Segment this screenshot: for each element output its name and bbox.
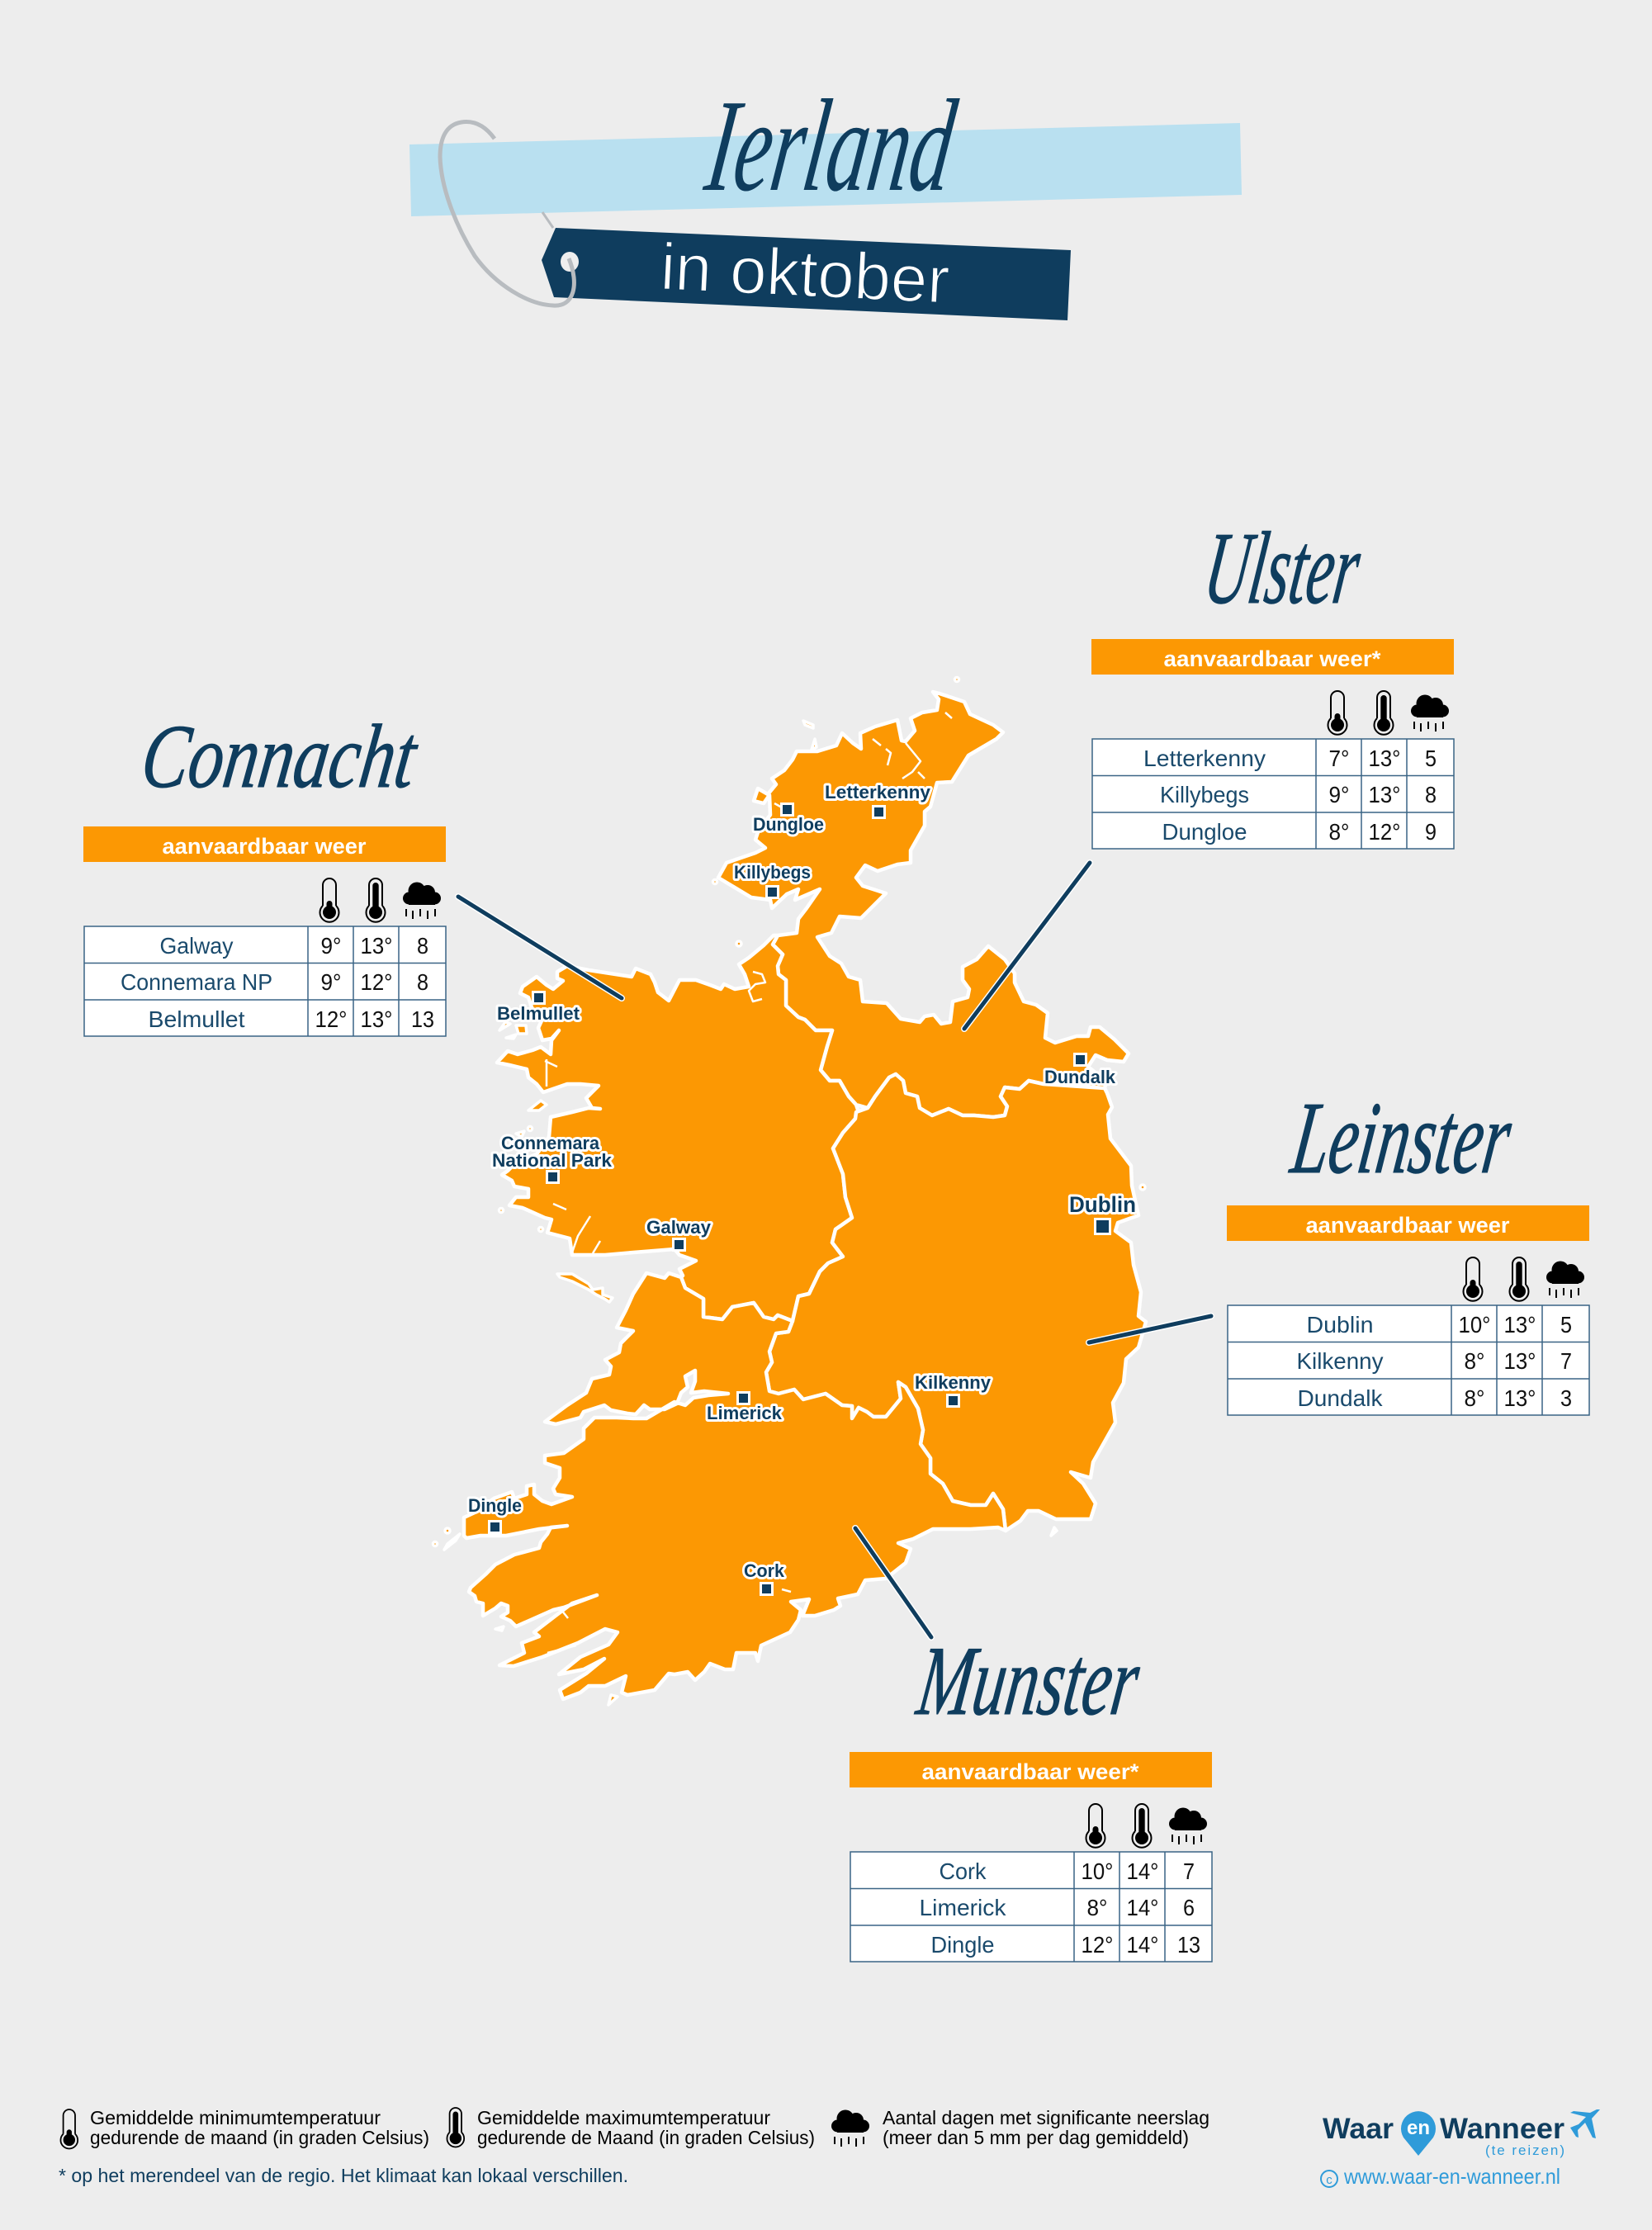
inlet details [545, 713, 952, 1653]
subtitle tag [542, 228, 1071, 320]
heading: Connacht [136, 705, 424, 807]
table: Letterkenny [1143, 746, 1266, 771]
table: 13° [1369, 746, 1400, 771]
city: Dingle [468, 1495, 522, 1534]
legend icon: minimum temperature [60, 2109, 78, 2148]
city: Dundalk [1044, 1053, 1115, 1087]
city: Galway: Galway [646, 1217, 711, 1238]
city: Killybegs [734, 862, 811, 899]
table: Kilkenny [1296, 1348, 1384, 1374]
map of Ireland [433, 677, 1146, 1705]
table: 12° [1082, 1932, 1113, 1958]
icons [320, 878, 441, 922]
table: Dingle [931, 1932, 994, 1958]
legend text: rain days: (meer dan 5 mm per dag gemiddeld) [883, 2127, 1189, 2148]
table: 9° [320, 933, 342, 959]
city: Letterkenny: Letterkenny [825, 782, 930, 803]
footnote: * op het merendeel van de regio. Het klimaat kan lokaal verschillen. [59, 2165, 628, 2186]
title text: Ierland [698, 73, 963, 219]
table: 13° [1504, 1348, 1536, 1374]
city: Connemara National Park [492, 1133, 612, 1184]
table: 8° [1329, 819, 1349, 845]
icon: plane [1570, 2109, 1600, 2138]
panel: Ulster [1091, 512, 1454, 849]
banner [1091, 639, 1454, 675]
leader line: Munster [855, 1528, 931, 1637]
legend icon: maximum temperature [447, 2108, 464, 2147]
legend text: maximum temperature [477, 2107, 815, 2148]
table: Belmullet [149, 1006, 245, 1032]
table: 5 [1425, 746, 1437, 771]
table: 8° [1086, 1895, 1108, 1920]
table: Dungloe [1162, 819, 1247, 845]
city: Kilkenny: Kilkenny [915, 1372, 991, 1393]
city: Limerick [707, 1391, 782, 1423]
table: Limerick [920, 1895, 1007, 1920]
region: Ulster [718, 692, 1129, 1117]
banner: aanvaardbaar weer [1306, 1213, 1510, 1238]
panel: Leinster [1227, 1082, 1589, 1415]
legend text: maximum temperature: gedurende de Maand (in graden Celsius) [477, 2127, 815, 2148]
table: 12° [315, 1006, 347, 1032]
city: Belmullet: Belmullet [497, 1003, 580, 1024]
islands [433, 677, 1145, 1705]
banner: aanvaardbaar weer [162, 834, 367, 859]
leader line: Ulster [964, 863, 1090, 1029]
table: 8 [417, 933, 428, 959]
heading: Leinster [1285, 1082, 1518, 1195]
website: www.waar-en-wanneer.nl [1343, 2164, 1560, 2189]
legend [59, 2107, 1209, 2186]
subtitle text: in oktober [659, 230, 951, 317]
city markers and labels [468, 782, 1136, 1596]
region: Munster [464, 1273, 1006, 1699]
logo subtitle: (te reizen) [1485, 2142, 1564, 2158]
city: Dungloe [753, 803, 824, 835]
city: Dingle: Dingle [468, 1495, 522, 1516]
legend text: minimum temperature: gedurende de maand (in graden Celsius) [90, 2127, 429, 2148]
city: Cork [744, 1560, 784, 1596]
icons [1086, 1804, 1207, 1848]
city: Killybegs: Killybegs [734, 862, 811, 883]
table: 7° [1329, 746, 1349, 771]
logo pin [1401, 2111, 1436, 2156]
table: Galway [160, 933, 233, 959]
logo wordmark: Wanneer: Wanneer [1440, 2113, 1564, 2145]
tag ring [440, 122, 574, 305]
table: 13° [1504, 1385, 1536, 1411]
legend text: rain days: Aantal dagen met significante neerslag [883, 2107, 1209, 2128]
table: 13° [1369, 782, 1400, 807]
icons [1463, 1257, 1584, 1301]
city: Dublin: Dublin [1069, 1192, 1136, 1217]
table: 6 [1183, 1895, 1195, 1920]
banner: aanvaardbaar weer* [921, 1759, 1139, 1784]
city: Dublin [1069, 1192, 1136, 1235]
city: Galway [646, 1217, 711, 1252]
city: Dungloe: Dungloe [753, 814, 824, 835]
city: Cork: Cork [744, 1560, 784, 1581]
table: 14° [1126, 1932, 1159, 1958]
city: Connemara National Park: National Park [492, 1150, 612, 1171]
table [850, 1852, 1212, 1962]
legend text: rain days [883, 2107, 1209, 2148]
table: 13° [1504, 1312, 1536, 1338]
legend text: minimum temperature [90, 2107, 429, 2148]
table: Cork [940, 1858, 987, 1884]
heading: Munster [911, 1627, 1147, 1736]
legend text: maximum temperature: Gemiddelde maximumtemperatuur [477, 2107, 770, 2128]
legend icon: rain days [831, 2110, 869, 2147]
city: Connemara National Park: Connemara [501, 1133, 599, 1153]
panel: Munster [850, 1627, 1212, 1962]
table: 7 [1560, 1348, 1572, 1374]
city: Belmullet [497, 991, 580, 1024]
table: Connemara NP [121, 969, 272, 995]
table: 13° [360, 933, 393, 959]
table: 9° [1329, 782, 1349, 807]
table [1092, 739, 1454, 849]
title block [409, 73, 1242, 320]
city: Letterkenny [825, 782, 930, 819]
banner: aanvaardbaar weer* [1164, 646, 1381, 671]
table: 10° [1458, 1312, 1491, 1338]
city: Kilkenny [915, 1372, 991, 1408]
table: 9 [1425, 819, 1437, 845]
table: 5 [1560, 1312, 1572, 1338]
tag string [542, 212, 553, 228]
table: 10° [1082, 1858, 1113, 1884]
table: 13 [1177, 1932, 1200, 1958]
table: 8 [417, 969, 428, 995]
region: Connacht [497, 935, 859, 1321]
tag hole [561, 252, 579, 272]
table: 8° [1465, 1348, 1484, 1374]
copyright mark [1321, 2171, 1337, 2187]
table: 12° [1369, 819, 1400, 845]
table: 3 [1560, 1385, 1572, 1411]
heading: Ulster [1198, 512, 1367, 626]
legend text: minimum temperature: Gemiddelde minimumtemperatuur [90, 2107, 381, 2128]
logo pin: en [1407, 2117, 1430, 2139]
table [1228, 1305, 1589, 1415]
logo wordmark: Waar: Waar [1323, 2113, 1394, 2145]
city: Limerick: Limerick [707, 1403, 782, 1423]
copyright mark: c [1326, 2173, 1332, 2187]
title band [409, 123, 1242, 216]
region: Leinster [766, 1074, 1146, 1531]
banner [1227, 1205, 1589, 1241]
city: Dundalk: Dundalk [1044, 1067, 1115, 1087]
table: Dundalk [1298, 1385, 1383, 1411]
table: 8° [1465, 1385, 1484, 1411]
leader line: Leinster [1089, 1316, 1211, 1342]
icons [1328, 691, 1449, 735]
table: 12° [360, 969, 393, 995]
banner [83, 826, 446, 862]
table: 13° [360, 1006, 393, 1032]
table: Killybegs [1160, 782, 1249, 807]
table: 13 [411, 1006, 434, 1032]
table [84, 926, 446, 1036]
table: 8 [1425, 782, 1437, 807]
table: 7 [1183, 1858, 1195, 1884]
table: 14° [1126, 1895, 1159, 1920]
banner [850, 1752, 1212, 1787]
table: 14° [1126, 1858, 1159, 1884]
table: 9° [320, 969, 342, 995]
leader line: Connacht [458, 897, 622, 998]
table: Dublin [1306, 1312, 1374, 1338]
logo [1321, 2109, 1600, 2189]
panel: Connacht [83, 705, 446, 1036]
